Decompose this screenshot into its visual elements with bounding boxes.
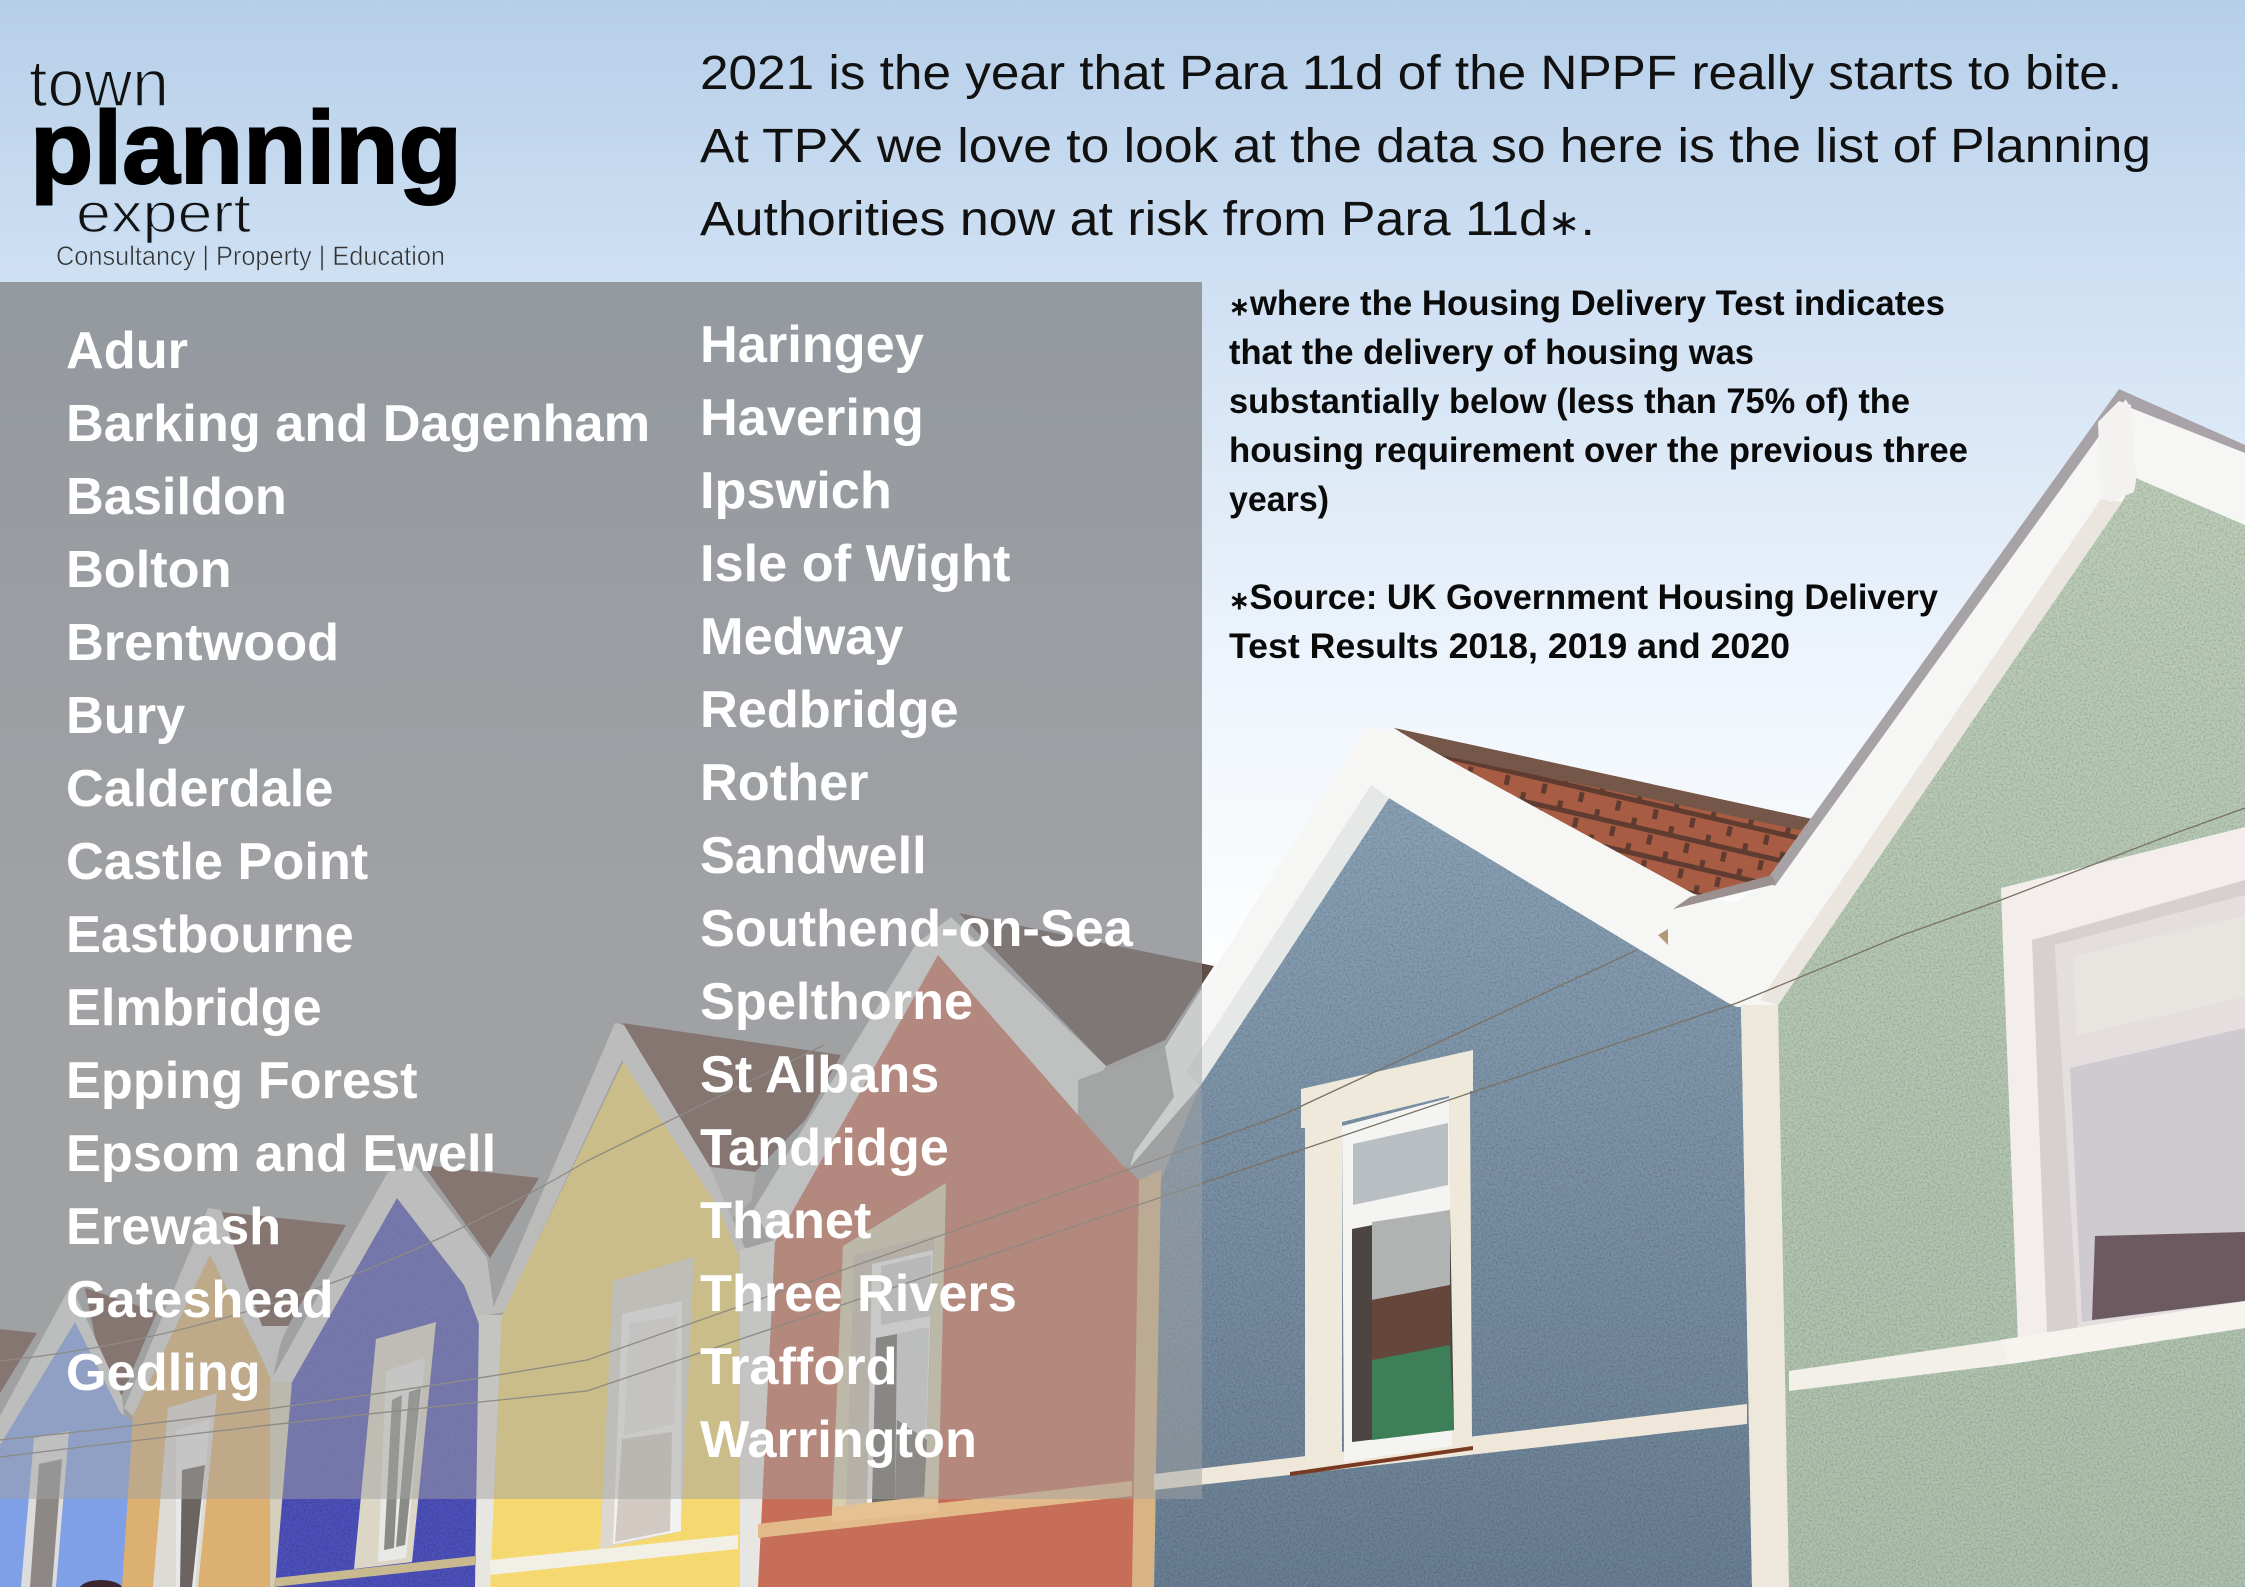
list: authorities column 2: Rother [700,754,869,812]
house: yellow [490,1023,841,1587]
list: authorities column 1: Brentwood [66,614,339,672]
list: authorities column 1: Bolton [66,541,232,599]
list: authorities column 2: Three Rivers [700,1265,1017,1323]
list: authorities column 1: Barking and Dagenham [66,395,650,453]
pedestrian head [79,1580,123,1587]
list: authorities column 2: Thanet [700,1192,871,1250]
headline text: At TPX we love to look at the data so here is the list of Planning [700,120,2151,173]
footnote: definition and source: years) [1229,480,1329,519]
headline text [700,47,2151,246]
list: authorities column 2: Sandwell [700,827,927,885]
house: green foreground [1778,478,2245,1587]
list: authorities column 2: Ipswich [700,462,892,520]
list: authorities column 1: Castle Point [66,833,368,891]
footnote: definition and source: Test Results 2018, 2019 and 2020 [1229,627,1790,666]
house: purple-blue [270,1165,539,1587]
blue house window [1301,1050,1473,1470]
headline text: Authorities now at risk from Para 11d ∗. [700,193,1595,246]
list: authorities column 2: Redbridge [700,681,959,739]
footnote: definition and source: ∗where the Housing Delivery Test indicates [1229,284,1945,323]
pilaster: tan and purple [270,1375,292,1587]
list: authorities column 2: Haringey [700,316,924,374]
list: authorities column 2: Warrington [700,1411,977,1469]
logo strapline: Consultancy | Property | Education [56,241,445,271]
house: terracotta [752,913,1214,1587]
list: authorities column 1: Epping Forest [66,1052,418,1110]
panel: grey list background [0,282,1202,1499]
footnote: definition and source: housing requirement over the previous three [1229,431,1968,470]
photo: houses seen through the panel [0,913,1202,1499]
list: authorities column 2: Southend-on-Sea [700,900,1134,958]
list: authorities column 1: Calderdale [66,760,333,818]
list: authorities column 1 [66,322,650,1402]
gable: white bargeboards [1078,389,2245,1167]
roof: brown tiles [1394,728,1812,898]
wires [0,808,2245,1457]
list: authorities column 2: Havering [700,389,924,447]
list: authorities column 2: Spelthorne [700,973,973,1031]
list: authorities column 2 [700,316,1134,1469]
wire fixing [1658,929,1668,945]
list: authorities column 1: Basildon [66,468,287,526]
list: authorities column 1: Eastbourne [66,906,354,964]
list: authorities column 1: Gedling [66,1344,261,1402]
logo: town planning expert [29,46,462,271]
list: authorities column 1: Elmbridge [66,979,322,1037]
house: light blue [0,1285,157,1587]
green house string course [1789,1301,2245,1391]
list: authorities column 1: Adur [66,322,188,380]
sill band [1154,1404,1747,1490]
footnote: definition and source [1229,284,1968,666]
list: authorities column 2: Trafford [700,1338,898,1396]
headline text: 2021 is the year that Para 11d of the NPPF really starts to bite. [700,47,2122,100]
house: blue-grey foreground [1154,798,1752,1587]
photo: terraced houses outside the panel [0,389,2245,1587]
logo word: town: town [29,46,169,120]
list: authorities column 2: St Albans [700,1046,939,1104]
list: authorities column 2: Tandridge [700,1119,949,1177]
pilaster: yellow and terracotta [740,1240,775,1587]
list: authorities column 1: Erewash [66,1198,281,1256]
list: authorities column 1: Gateshead [66,1271,333,1329]
list: authorities column 2: Isle of Wight [700,535,1010,593]
logo word: expert: expert [76,181,251,244]
green house window [2000,827,2245,1364]
pilaster: terracotta and blue [1132,1170,1161,1587]
list: authorities column 1: Bury [66,687,185,745]
list: authorities column 1: Epsom and Ewell [66,1125,496,1183]
house: tan [122,1208,346,1587]
footnote: definition and source: that the delivery of housing was [1229,333,1754,372]
list: authorities column 2: Medway [700,608,903,666]
footnote: definition and source: ∗Source: UK Government Housing Delivery [1229,578,1939,617]
footnote: definition and source: substantially below (less than 75% of) the [1229,382,1910,421]
pilaster: purple and yellow [475,1315,502,1587]
logo word: planning: planning [30,90,462,205]
pilaster between houses [1741,1005,1789,1587]
